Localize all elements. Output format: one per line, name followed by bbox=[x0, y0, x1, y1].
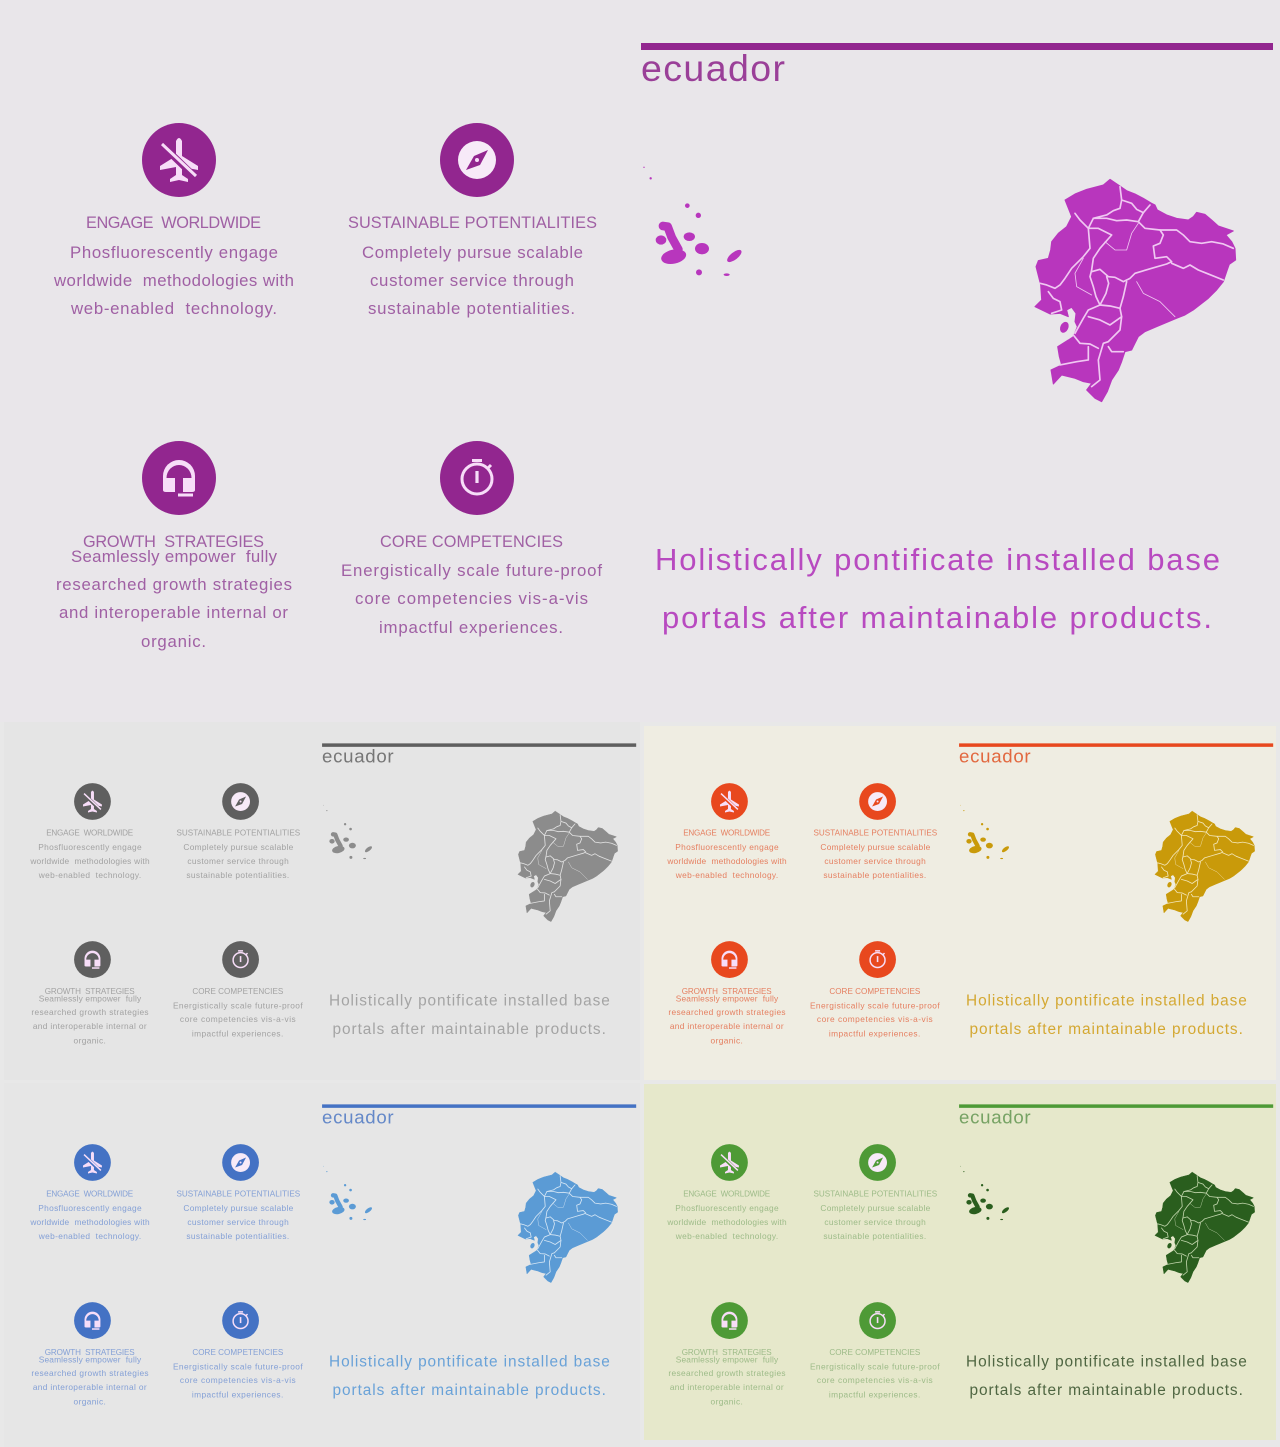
block: sustainable potentialities: sustainable potentialities. bbox=[368, 299, 575, 318]
panel content: GROWTH STRATEGIES bbox=[682, 987, 772, 996]
block: growth strategies: GROWTH STRATEGIES bbox=[83, 533, 264, 551]
headline: Holistically pontificate installed base bbox=[655, 542, 1220, 577]
panel content: ENGAGE WORLDWIDE bbox=[683, 828, 771, 837]
panel content: impactful experiences. bbox=[829, 1390, 920, 1400]
panel: blue bbox=[4, 1083, 640, 1447]
panel content: Seamlessly empower fully bbox=[676, 993, 779, 1003]
block: sustainable potentialities: Completely pursue scalable bbox=[362, 243, 583, 262]
panel content: impactful experiences. bbox=[829, 1029, 920, 1039]
panel: green bbox=[644, 1084, 1276, 1440]
panel content: researched growth strategies bbox=[31, 1007, 149, 1017]
panel content: Completely pursue scalable bbox=[183, 1203, 294, 1213]
panel content: and interoperable internal or bbox=[33, 1021, 147, 1031]
panel content: Completely pursue scalable bbox=[183, 842, 294, 852]
panel content bbox=[666, 743, 1273, 1046]
icon: plane bbox=[142, 123, 216, 197]
panel content: CORE COMPETENCIES bbox=[829, 1348, 921, 1357]
panel content bbox=[666, 1104, 1273, 1407]
headline bbox=[655, 542, 1220, 635]
panel content: GROWTH STRATEGIES bbox=[45, 987, 135, 996]
panel content: Energistically scale future-proof bbox=[173, 1000, 303, 1010]
panel content: web-enabled technology. bbox=[38, 870, 141, 880]
panel: gray bbox=[4, 722, 640, 1080]
panel content: ENGAGE WORLDWIDE bbox=[46, 1189, 134, 1198]
panel content: CORE COMPETENCIES bbox=[192, 1348, 284, 1357]
title: ecuador bbox=[641, 47, 785, 89]
panel content: CORE COMPETENCIES bbox=[192, 987, 284, 996]
panel content bbox=[29, 743, 636, 1046]
block: growth strategies: researched growth strategies bbox=[56, 575, 292, 594]
block: engage worldwide: web-enabled technology. bbox=[70, 299, 277, 318]
panel: purple main bbox=[0, 0, 1280, 722]
panel content: and interoperable internal or bbox=[670, 1382, 784, 1392]
panel content: Holistically pontificate installed base bbox=[329, 992, 610, 1009]
panel content: Completely pursue scalable bbox=[820, 842, 931, 852]
icon: stopwatch bbox=[440, 441, 514, 515]
headline: portals after maintainable products. bbox=[662, 600, 1212, 635]
panel content: worldwide methodologies with bbox=[666, 856, 787, 866]
title bar bbox=[641, 43, 1273, 50]
panel content: customer service through bbox=[824, 1217, 926, 1227]
block: sustainable potentialities: customer service through bbox=[370, 271, 574, 290]
panel content: ecuador bbox=[322, 745, 394, 766]
panel content: ENGAGE WORLDWIDE bbox=[46, 828, 134, 837]
panel content: core competencies vis-a-vis bbox=[817, 1014, 933, 1024]
panel content: CORE COMPETENCIES bbox=[829, 987, 921, 996]
panel content: portals after maintainable products. bbox=[333, 1021, 606, 1038]
panel content: and interoperable internal or bbox=[670, 1021, 784, 1031]
panel content: organic. bbox=[74, 1036, 106, 1046]
block: engage worldwide: Phosfluorescently engage bbox=[70, 243, 278, 262]
panel content: Seamlessly empower fully bbox=[39, 1354, 142, 1364]
panel content: portals after maintainable products. bbox=[970, 1382, 1243, 1399]
block: core competencies: CORE COMPETENCIES bbox=[380, 533, 563, 551]
panel content: sustainable potentialities. bbox=[186, 870, 289, 880]
block: growth strategies bbox=[56, 533, 292, 651]
panel content: impactful experiences. bbox=[192, 1390, 283, 1400]
panel content: researched growth strategies bbox=[31, 1368, 149, 1378]
block: core competencies: impactful experiences. bbox=[379, 618, 563, 637]
islands map bbox=[643, 167, 743, 276]
panel content: Holistically pontificate installed base bbox=[966, 992, 1247, 1009]
panel content: ENGAGE WORLDWIDE bbox=[683, 1189, 771, 1198]
panel content: core competencies vis-a-vis bbox=[817, 1375, 933, 1385]
panel content: GROWTH STRATEGIES bbox=[682, 1348, 772, 1357]
panel content: and interoperable internal or bbox=[33, 1382, 147, 1392]
panel content: ecuador bbox=[959, 745, 1031, 766]
panel content: web-enabled technology. bbox=[675, 870, 778, 880]
block: growth strategies: Seamlessly empower fully bbox=[71, 547, 278, 566]
panel content: web-enabled technology. bbox=[38, 1231, 141, 1241]
panel content: impactful experiences. bbox=[192, 1029, 283, 1039]
panel content: web-enabled technology. bbox=[675, 1231, 778, 1241]
panel content: customer service through bbox=[824, 856, 926, 866]
panel content: organic. bbox=[74, 1397, 106, 1407]
panel: orange bbox=[644, 726, 1276, 1080]
panel content: core competencies vis-a-vis bbox=[180, 1375, 296, 1385]
panel content: researched growth strategies bbox=[668, 1007, 786, 1017]
panel content: sustainable potentialities. bbox=[186, 1231, 289, 1241]
panel content: Energistically scale future-proof bbox=[810, 1361, 940, 1371]
panel content: SUSTAINABLE POTENTIALITIES bbox=[176, 828, 301, 837]
panel content: researched growth strategies bbox=[668, 1368, 786, 1378]
panel content: Completely pursue scalable bbox=[820, 1203, 931, 1213]
panel content: Phosfluorescently engage bbox=[38, 842, 142, 852]
panel content: customer service through bbox=[187, 1217, 289, 1227]
panel content: Phosfluorescently engage bbox=[675, 842, 779, 852]
panel content: SUSTAINABLE POTENTIALITIES bbox=[813, 828, 938, 837]
panel content: worldwide methodologies with bbox=[666, 1217, 787, 1227]
block: growth strategies: and interoperable internal or bbox=[59, 603, 288, 622]
panel content: Phosfluorescently engage bbox=[38, 1203, 142, 1213]
panel content bbox=[29, 1104, 636, 1407]
panel content: worldwide methodologies with bbox=[29, 856, 150, 866]
panel content: core competencies vis-a-vis bbox=[180, 1014, 296, 1024]
panel content: Energistically scale future-proof bbox=[173, 1361, 303, 1371]
panel content: portals after maintainable products. bbox=[333, 1382, 606, 1399]
block: sustainable potentialities bbox=[348, 214, 597, 318]
panel content: SUSTAINABLE POTENTIALITIES bbox=[176, 1189, 301, 1198]
panel content: portals after maintainable products. bbox=[970, 1021, 1243, 1038]
panel content: Holistically pontificate installed base bbox=[329, 1353, 610, 1370]
panel content: sustainable potentialities. bbox=[823, 870, 926, 880]
panel content: Seamlessly empower fully bbox=[676, 1354, 779, 1364]
block: engage worldwide: ENGAGE WORLDWIDE bbox=[86, 214, 261, 232]
panel content: sustainable potentialities. bbox=[823, 1231, 926, 1241]
panel content: customer service through bbox=[187, 856, 289, 866]
panel content: organic. bbox=[711, 1397, 743, 1407]
block: engage worldwide bbox=[53, 214, 294, 318]
panel content: Energistically scale future-proof bbox=[810, 1000, 940, 1010]
icon: compass bbox=[440, 123, 514, 197]
block: core competencies: Energistically scale future-proof bbox=[341, 561, 602, 580]
panel content: GROWTH STRATEGIES bbox=[45, 1348, 135, 1357]
panel content: organic. bbox=[711, 1036, 743, 1046]
panel content: Phosfluorescently engage bbox=[675, 1203, 779, 1213]
block: core competencies bbox=[341, 533, 602, 637]
panel content: ecuador bbox=[322, 1106, 394, 1127]
panel content: Seamlessly empower fully bbox=[39, 993, 142, 1003]
block: core competencies: core competencies vis-a-vis bbox=[355, 589, 588, 608]
block: engage worldwide: worldwide methodologies with bbox=[53, 271, 294, 290]
Ecuador map bbox=[1035, 179, 1236, 402]
panel content: ecuador bbox=[959, 1106, 1031, 1127]
panel content: SUSTAINABLE POTENTIALITIES bbox=[813, 1189, 938, 1198]
icon: headset bbox=[142, 441, 216, 515]
block: sustainable potentialities: SUSTAINABLE POTENTIALITIES bbox=[348, 214, 597, 232]
block: growth strategies: organic. bbox=[141, 632, 206, 651]
panel content: worldwide methodologies with bbox=[29, 1217, 150, 1227]
panel content: Holistically pontificate installed base bbox=[966, 1353, 1247, 1370]
